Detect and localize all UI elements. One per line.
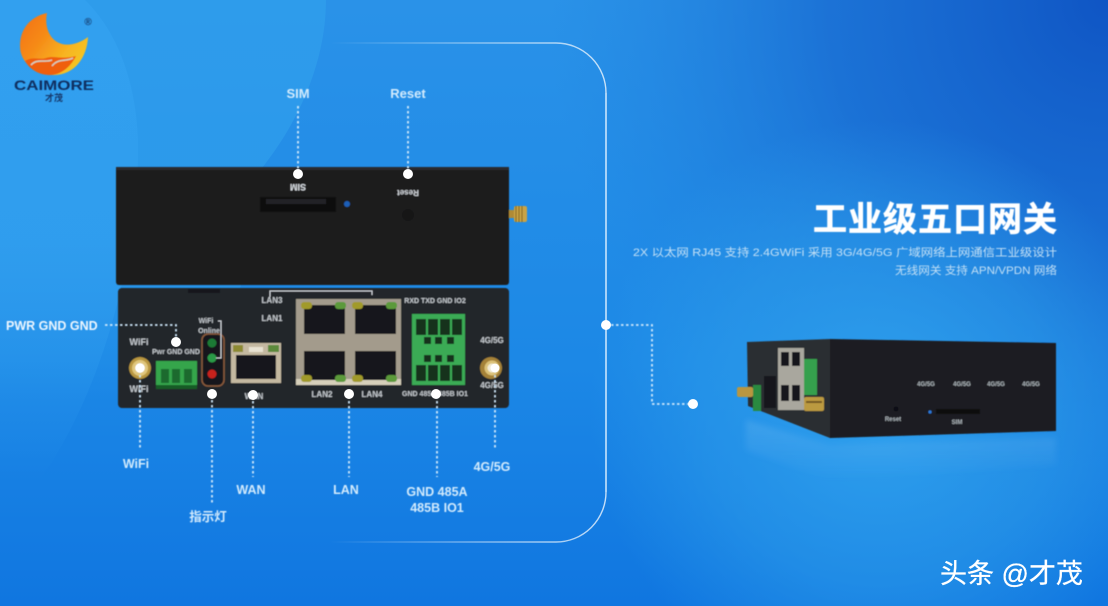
status led: [344, 201, 350, 207]
callout leader lines: [105, 106, 692, 503]
wan port: [231, 343, 281, 383]
serial labels: RXD TXD GND IO2: [404, 298, 466, 305]
wan port side: [764, 376, 776, 408]
registered mark: ®: [84, 17, 92, 28]
callout labels: [6, 86, 510, 524]
side labels: 4G/5G: [953, 382, 971, 388]
callout labels: SIM: [286, 86, 310, 101]
serial terminal: [412, 314, 465, 385]
callout labels: 485B IO1: [410, 501, 464, 515]
Reset label on device: Reset: [397, 188, 419, 197]
indicator labels: WiFi: [199, 318, 213, 325]
sim slot side: [936, 409, 980, 414]
side labels: 4G/5G: [1022, 382, 1040, 388]
sim slot: [260, 197, 336, 212]
description text: [633, 245, 1057, 277]
rounded outline frame: [330, 43, 606, 542]
green terminal left: [753, 385, 761, 411]
lan bracket and labels: [262, 291, 383, 399]
lan bracket and labels: LAN2: [312, 390, 333, 399]
device: perspective view: [737, 339, 1056, 480]
lan bracket and labels: LAN1: [262, 314, 283, 323]
callout labels: 指示灯: [189, 509, 227, 524]
wifi labels: [130, 337, 148, 394]
power terminal: [156, 361, 197, 389]
icon: orange crescent moon: [20, 13, 88, 75]
right face: [830, 339, 1056, 438]
callout labels: 4G/5G: [474, 460, 510, 474]
callout labels: Reset: [390, 86, 426, 101]
left face: [747, 339, 830, 438]
led side: [928, 410, 932, 414]
side labels: 4G/5G: [987, 382, 1005, 388]
callout labels: GND 485A: [406, 485, 468, 499]
4G/5G labels: 4G/5G: [480, 381, 504, 390]
4G/5G labels: 4G/5G: [480, 336, 504, 345]
serial labels: [402, 298, 468, 398]
wifi labels: WiFi: [130, 384, 148, 394]
SIM label on device: SIM: [290, 182, 306, 192]
side labels: Reset: [885, 417, 901, 423]
serial labels: GND 485A 485B IO1: [402, 391, 468, 398]
lan ports: [296, 299, 401, 385]
callout dots: [136, 169, 698, 409]
indicator labels: Online: [198, 328, 220, 335]
wordmark: CAIMORE: [14, 77, 94, 93]
antenna right: [804, 397, 824, 411]
power label: Pwr GND GND: [152, 349, 200, 356]
chinese brand name: 才茂: [45, 92, 63, 103]
4G/5G antenna connector: [480, 357, 502, 379]
lan bracket and labels: LAN3: [262, 296, 283, 305]
device: front view: [118, 288, 509, 408]
wifi labels: WiFi: [130, 337, 148, 347]
antenna left: [737, 387, 753, 397]
description text: 2X 以太网 RJ45 支持 2.4GWiFi 采用 3G/4G/5G 广域网络上网通信工业级设计: [633, 245, 1057, 259]
indicator labels: [198, 318, 220, 335]
side labels: [885, 382, 1040, 426]
reset hole side: [894, 406, 898, 412]
callout labels: PWR GND GND: [6, 319, 98, 333]
heading: 工业级五口网关: [813, 201, 1058, 239]
description text: 无线网关 支持 APN/VPDN 网络: [895, 263, 1057, 277]
callout labels: WiFi: [123, 457, 149, 471]
wifi antenna connector: [129, 357, 151, 379]
indicator lights: [202, 321, 224, 386]
antenna top: [508, 206, 527, 222]
wan label: WAN: [245, 392, 264, 401]
lan bracket and labels: LAN4: [362, 390, 383, 399]
lan ports side: [778, 348, 804, 410]
callout labels: LAN: [333, 483, 359, 497]
reflection: [746, 420, 1056, 480]
logo: CAIMORE: [14, 13, 94, 103]
4G/5G labels: [480, 336, 504, 390]
green terminal side: [804, 359, 817, 395]
watermark: 头条 @才茂: [940, 559, 1083, 589]
side labels: SIM: [952, 420, 962, 426]
callout labels: WAN: [236, 483, 266, 497]
device: top view: [116, 167, 527, 285]
side labels: 4G/5G: [917, 382, 935, 388]
reset hole: [402, 209, 414, 221]
